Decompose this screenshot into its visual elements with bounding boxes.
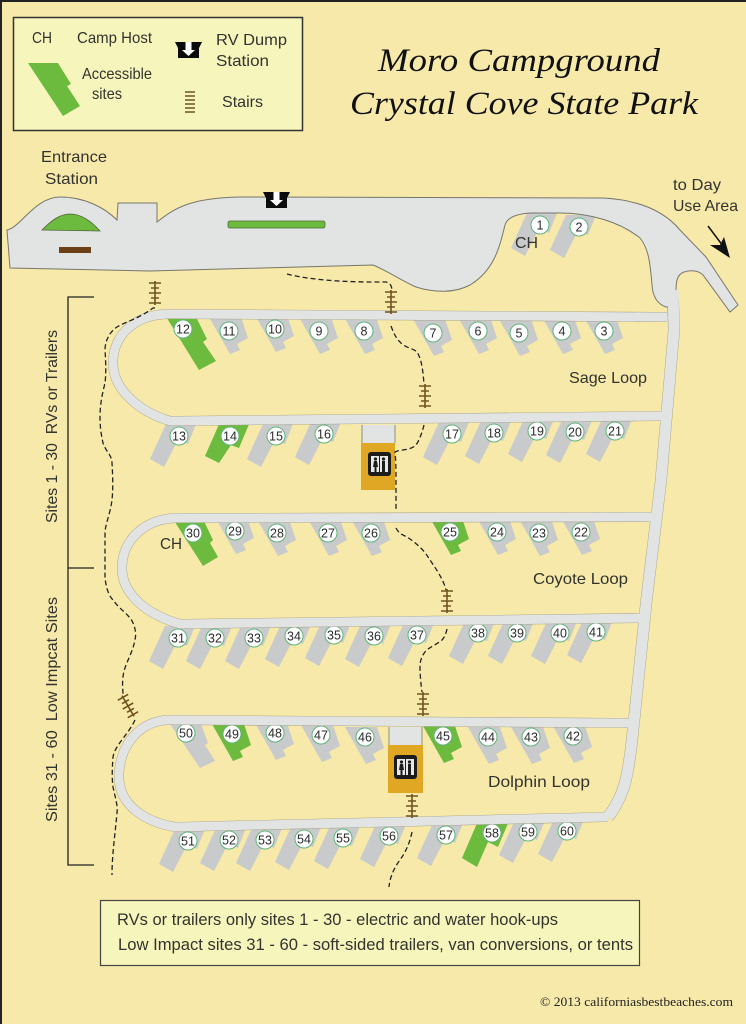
site 32: 32 [208,632,222,646]
stairs: coyote [441,589,453,613]
site 35 [305,623,351,666]
site 46: 46 [358,730,372,744]
legend: stairs icon [185,92,195,112]
entrance station building [59,247,91,253]
legend: camp host: CH [32,30,52,47]
site 43: 43 [524,730,538,744]
label: Coyote Loop: Coyote Loop [533,571,628,588]
site 34 [265,624,311,667]
site 56: 56 [382,830,396,844]
site 19: 19 [530,424,544,438]
title: Moro Campground [377,43,661,79]
site 16: 16 [317,428,331,442]
site 6: 6 [475,324,482,338]
site 54: 54 [297,832,311,846]
restroom lower [388,727,423,793]
legend: camp host: Camp Host [77,30,153,47]
site 15 [247,424,293,467]
site 31 [149,626,195,669]
site 27 [308,519,347,556]
site 49 accessible: 49 [225,728,239,742]
bracket: site groups [68,297,94,865]
site 41: 41 [589,626,603,640]
site 20: 20 [568,426,582,440]
site 18: 18 [487,426,501,440]
site 52: 52 [222,834,236,848]
legend: RV dump text [216,32,287,70]
legend panel [14,18,302,130]
site 39: 39 [510,626,524,640]
label: CH site 1: CH [515,235,538,252]
site 44 [468,727,507,764]
site 27: 27 [321,526,335,540]
icon: RV dump station [263,192,290,208]
site 9 [299,317,338,354]
stairs: west trail [117,693,139,719]
site 8: 8 [361,324,368,338]
green bar accessible parking [228,221,325,228]
site 30 accessible [173,519,218,566]
site 37 [388,623,434,666]
title [350,43,699,122]
road outlines [113,300,674,827]
legend: RV dump text: Station [216,53,269,70]
legend: accessible sites text: sites [92,86,122,103]
title: Crystal Cove State Park [350,86,699,122]
site 23: 23 [532,526,546,540]
site 3: 3 [601,324,608,338]
site 11: 11 [223,324,236,338]
site 17 [423,422,469,465]
site 46 [345,727,384,764]
site 21: 21 [608,424,622,438]
site 1 [511,213,557,256]
site 57: 57 [439,828,453,842]
legend: accessible sites text [82,66,152,103]
site 3 [584,317,623,354]
site 51 [159,829,205,872]
site 14 accessible: 14 [223,430,237,444]
site 11 [209,317,248,354]
site 48: 48 [268,726,282,740]
site 15: 15 [269,430,283,444]
site 30 accessible: 30 [186,526,200,540]
site 13: 13 [172,430,186,444]
label: CH site 30: CH [160,536,182,553]
site 22 [561,518,600,555]
site 59: 59 [521,826,535,840]
stairs: dolphin restroom [406,794,418,818]
site 4: 4 [559,324,566,338]
site 55 [314,826,360,869]
site 13 [150,424,196,467]
site 19 [508,419,554,462]
site 34: 34 [287,630,301,644]
site 5 [499,319,538,356]
site 32 [186,626,232,669]
site 33: 33 [247,632,261,646]
label: to day use area: to Day [673,177,721,194]
site 40: 40 [553,626,567,640]
site 38: 38 [471,626,485,640]
site 12 accessible [165,315,216,370]
site 39 [488,621,534,664]
camp sites [149,213,632,872]
site 45 accessible [423,726,462,763]
site 24: 24 [490,526,504,540]
label: entrance station [41,149,107,188]
site 50: 50 [179,726,193,740]
site 38 [449,621,495,664]
site 37: 37 [410,628,424,642]
site 53 [236,828,282,871]
legend: accessible sites icon [28,63,80,116]
stairs: sage loop [419,384,431,408]
site 24 [477,518,516,555]
site 4 [542,317,581,354]
label: Sage Loop: Sage Loop [569,370,647,387]
site 17: 17 [445,428,459,442]
site 22: 22 [574,526,588,540]
site 48 [255,723,294,760]
site 28 [257,519,296,556]
info box: Low Impact sites 31 - 60 - soft-sided trailers, van conversions, or tents [118,936,633,954]
entrance green dome [42,214,100,231]
stairs: entrance [149,281,161,305]
legend: accessible sites text: Accessible [82,66,152,83]
info box [100,900,640,966]
site 28: 28 [270,526,284,540]
site 33 [225,626,271,669]
arrow to day use area [708,226,730,258]
site 42 [553,726,592,763]
restroom upper [361,425,395,490]
site 14 accessible [205,422,250,463]
site 60 [538,819,584,862]
site 26 [351,519,390,556]
site 55: 55 [336,832,350,846]
stairs: north [385,290,397,314]
site 40 [531,621,577,664]
site 5: 5 [516,326,523,340]
stairs: coyote to dolphin [417,692,429,716]
site 45 accessible: 45 [436,730,450,744]
site 12 accessible: 12 [176,322,190,336]
site 36: 36 [367,630,381,644]
site 10 [255,315,294,352]
site 2: 2 [576,220,583,234]
site 53: 53 [258,834,272,848]
label: entrance station: Station [45,171,98,188]
site 21 [586,419,632,462]
copyright: © 2013 californiasbestbeaches.com [540,994,733,1009]
label: sites 1-30: Sites 1 - 30 RVs or Trailers [44,330,61,523]
site 47 [301,725,340,762]
label: Dolphin Loop: Dolphin Loop [488,774,590,791]
dashed trails [100,274,447,887]
site 59 [499,820,545,863]
site 7 [413,319,452,356]
site 52 [200,828,246,871]
site 51: 51 [181,834,195,848]
site 29: 29 [228,524,242,538]
site 49 accessible [212,724,251,761]
site 10: 10 [268,322,282,336]
label: sites 31-60: Sites 31 - 60 Low Impcat Sites [44,597,61,822]
site 43 [511,727,550,764]
site 42: 42 [566,730,580,744]
site 44: 44 [481,730,495,744]
site 60: 60 [560,824,574,838]
site 20 [546,420,592,463]
road fills [113,290,674,827]
site 9: 9 [316,324,323,338]
site 29 [215,517,254,554]
site 26: 26 [364,526,378,540]
info box: RVs or trailers only sites 1 - 30 - electric and water hook-ups [117,911,558,929]
site 36 [345,624,391,667]
site 50 [168,721,215,768]
site 7: 7 [430,326,437,340]
site 56 [360,824,406,867]
legend: stairs text: Stairs [222,94,263,111]
site 58 accessible: 58 [485,826,499,840]
site 23 [519,519,558,556]
roads and entrance area [7,197,738,827]
site 6 [458,317,497,354]
site 41 [567,620,613,663]
site 18 [465,421,511,464]
site 8 [344,317,383,354]
site 57 [417,823,463,866]
site 54 [275,827,321,870]
legend: camp host [32,30,153,47]
site 31: 31 [171,632,185,646]
site 25 accessible: 25 [443,526,457,540]
site 25 accessible [430,518,469,555]
site 16 [295,422,341,465]
legend: RV dump text: RV Dump [216,32,287,49]
legend: RV dump icon [175,42,202,58]
site 2 [550,215,596,258]
label: to day use area: Use Area [673,198,738,215]
site 35: 35 [327,628,341,642]
label: entrance station: Entrance [41,149,107,166]
site 58 accessible [462,821,509,867]
site 47: 47 [314,728,328,742]
label: to day use area [673,177,738,215]
site 1: 1 [537,218,544,232]
